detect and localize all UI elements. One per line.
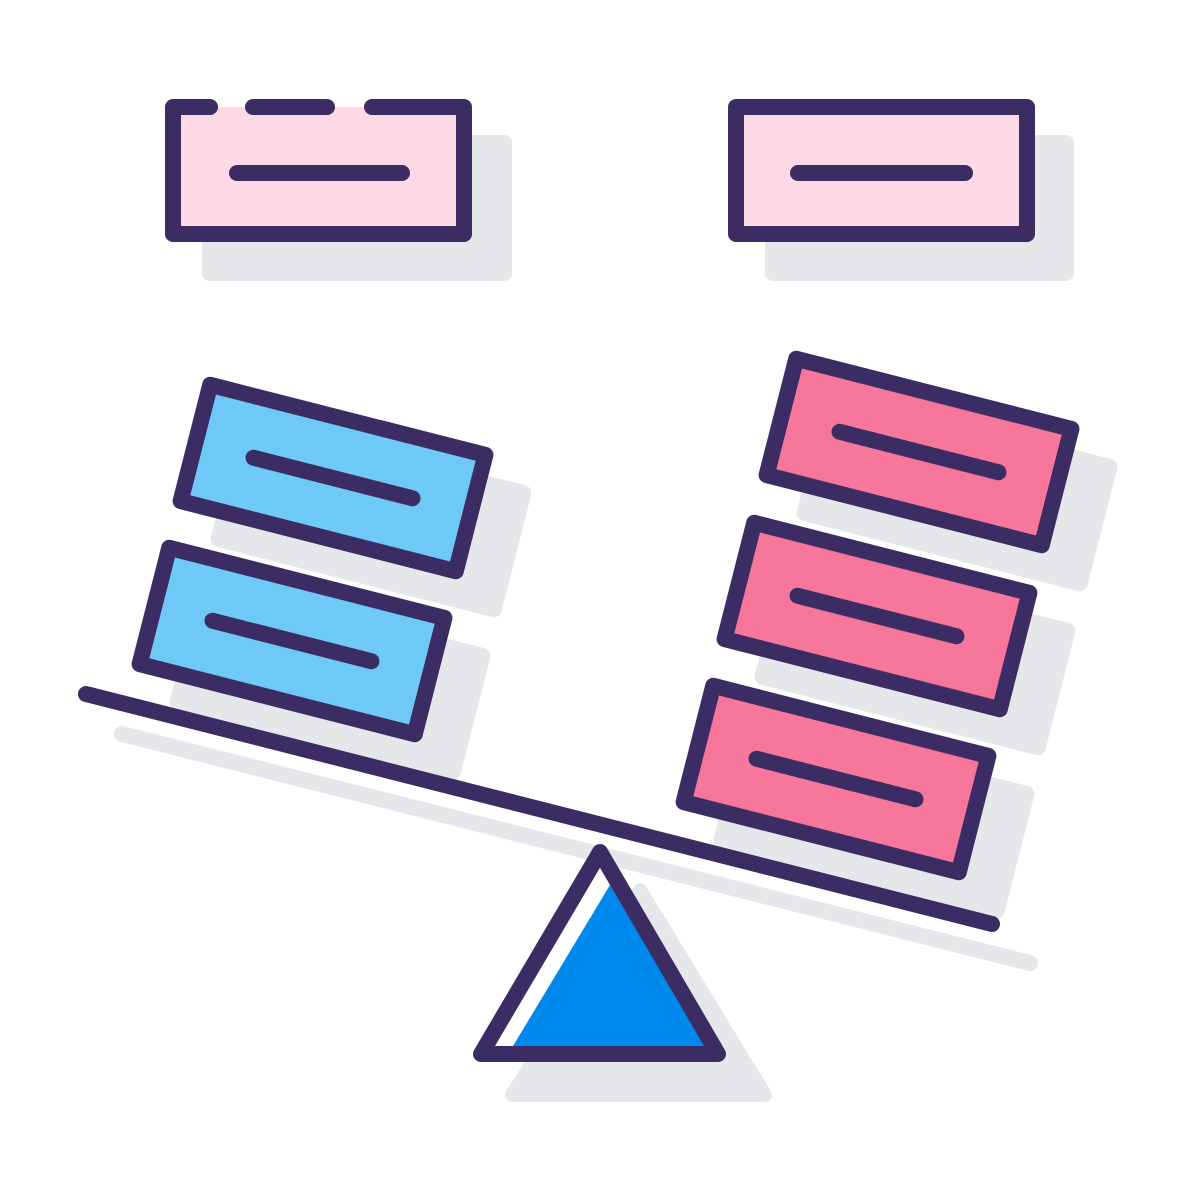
left blue blocks: [140, 385, 485, 734]
top-left label box (dashed top): [173, 107, 464, 234]
fulcrum triangle: [481, 852, 718, 1054]
right pink blocks: [684, 359, 1071, 872]
shadows: [122, 135, 1119, 1095]
top-right label box: [736, 107, 1027, 234]
seesaw beam: [86, 694, 992, 924]
